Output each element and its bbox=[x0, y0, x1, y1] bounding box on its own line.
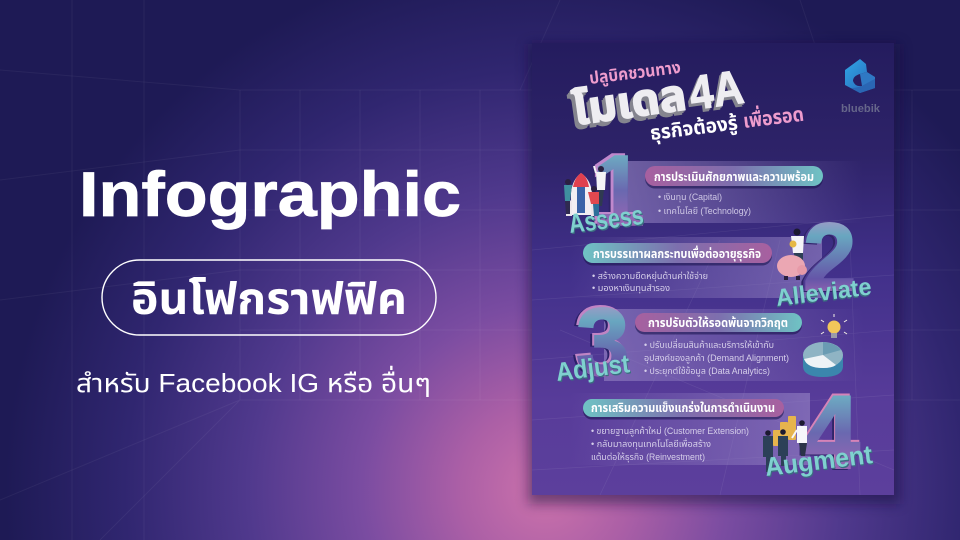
Augment label: Augment bbox=[763, 439, 874, 482]
section 2 bullets: • มองหาเงินทุนสำรอง bbox=[592, 283, 670, 293]
Assess label: Assess bbox=[567, 200, 645, 239]
section 1: Assess bbox=[564, 133, 863, 247]
section 1 bullets: • เทคโนโลยี (Technology) bbox=[658, 206, 751, 216]
number 3: 3 bbox=[574, 287, 627, 394]
poster bbox=[528, 43, 900, 504]
section 3 bullets: อุปสงค์ของลูกค้า (Demand Alignment) bbox=[644, 353, 789, 364]
section 1 pill: การประเมินศักยภาพและความพร้อม bbox=[654, 170, 814, 184]
number 2: 2 bbox=[803, 204, 856, 311]
number 3: 3 bbox=[576, 289, 629, 396]
Augment label: Augment bbox=[764, 440, 875, 483]
section 1 bullets: • เงินทุน (Capital) bbox=[658, 192, 722, 202]
number 4: 4 bbox=[802, 375, 860, 491]
Alleviate label: Alleviate bbox=[774, 275, 872, 313]
left heading: Infographic: Infographic bbox=[79, 160, 461, 230]
number 1: 1 bbox=[587, 134, 640, 246]
title main word 3D: โมเดล bbox=[569, 72, 688, 136]
title line 1: ปลูบิคชวนทาง bbox=[588, 58, 682, 89]
section 3 bullets: • ประยุกต์ใช้ข้อมูล (Data Analytics) bbox=[644, 366, 770, 377]
left subtitle: สำหรับ Facebook IG หรือ อื่นๆ bbox=[76, 365, 431, 398]
Assess label: Assess bbox=[568, 201, 646, 240]
number 2: 2 bbox=[801, 204, 854, 311]
title pink: เพื่อรอด bbox=[741, 100, 805, 133]
section 4 pill: การเสริมความแข็งแกร่งในการดำเนินงาน bbox=[591, 401, 775, 415]
section 4: Augment bbox=[570, 373, 875, 492]
illustration: rocket and team bbox=[564, 166, 606, 216]
section 1 pill bbox=[645, 166, 823, 188]
outlined pill: Thai label bbox=[102, 260, 436, 335]
section 1 bullets bbox=[658, 192, 751, 216]
section 2 pill bbox=[583, 243, 772, 266]
number 3: 3 bbox=[572, 288, 625, 395]
outlined pill: Thai label: อินโฟกราฟฟิค bbox=[131, 275, 407, 324]
title 4A 3D: 4A bbox=[685, 63, 746, 123]
section 2 bullets bbox=[592, 271, 708, 293]
logo: bluebik: bluebik bbox=[841, 103, 881, 115]
section 2 pill: การบรรเทาผลกระทบเพื่อต่ออายุธุรกิจ bbox=[593, 245, 761, 261]
Alleviate label: Alleviate bbox=[774, 273, 873, 312]
Adjust label: Adjust bbox=[554, 348, 631, 387]
section 3 bullets bbox=[644, 338, 789, 377]
title main word 3D: โมเดล bbox=[567, 73, 687, 138]
title line 3: ธุรกิจต้องรู้ bbox=[649, 112, 739, 145]
section 1 panel bbox=[628, 161, 863, 223]
illustration: man and piggy bank bbox=[777, 228, 807, 280]
number 2: 2 bbox=[799, 205, 852, 312]
logo: bluebik bbox=[841, 59, 881, 115]
title main word 3D: โมเดล bbox=[566, 75, 686, 139]
section 4 bullets bbox=[591, 426, 749, 462]
section 4 bullets: แต้มต่อให้ธุรกิจ (Reinvestment) bbox=[591, 452, 705, 462]
number 4: 4 bbox=[801, 373, 859, 489]
icon: light bulb bbox=[821, 314, 847, 338]
section 4 bullets: • กลับมาลงทุนเทคโนโลยีเพื่อสร้าง bbox=[591, 437, 711, 449]
title main word 3D: โมเดล bbox=[570, 71, 689, 135]
title 4A 3D: 4A bbox=[684, 64, 744, 124]
section 3 pill: การปรับตัวให้รอดพ้นจากวิกฤต bbox=[648, 316, 788, 330]
section 3 panel bbox=[604, 309, 864, 381]
section 2 bullets: • สร้างความยืดหยุ่นด้านค่าใช้จ่าย bbox=[592, 271, 708, 281]
section 4 panel bbox=[570, 393, 810, 465]
title 4A 3D: 4A bbox=[686, 61, 747, 121]
poster title bbox=[566, 58, 805, 145]
section 2: Alleviate bbox=[570, 204, 873, 313]
section 2 panel bbox=[570, 237, 822, 298]
number 1: 1 bbox=[592, 135, 645, 247]
number 1: 1 bbox=[589, 133, 642, 245]
section 3: Adjust bbox=[554, 287, 864, 396]
section 3 bullets: • ปรับเปลี่ยนสินค้าและบริการให้เข้ากับ bbox=[644, 338, 774, 350]
section 3 pill bbox=[635, 313, 802, 334]
number 4: 4 bbox=[799, 376, 857, 492]
section 4 bullets: • ขยายฐานลูกค้าใหม่ (Customer Extension) bbox=[591, 426, 749, 437]
section 4 pill bbox=[583, 399, 784, 420]
illustration: business people and coins bbox=[763, 416, 807, 472]
icon: pie chart bbox=[803, 342, 843, 377]
Adjust label: Adjust bbox=[555, 349, 632, 388]
